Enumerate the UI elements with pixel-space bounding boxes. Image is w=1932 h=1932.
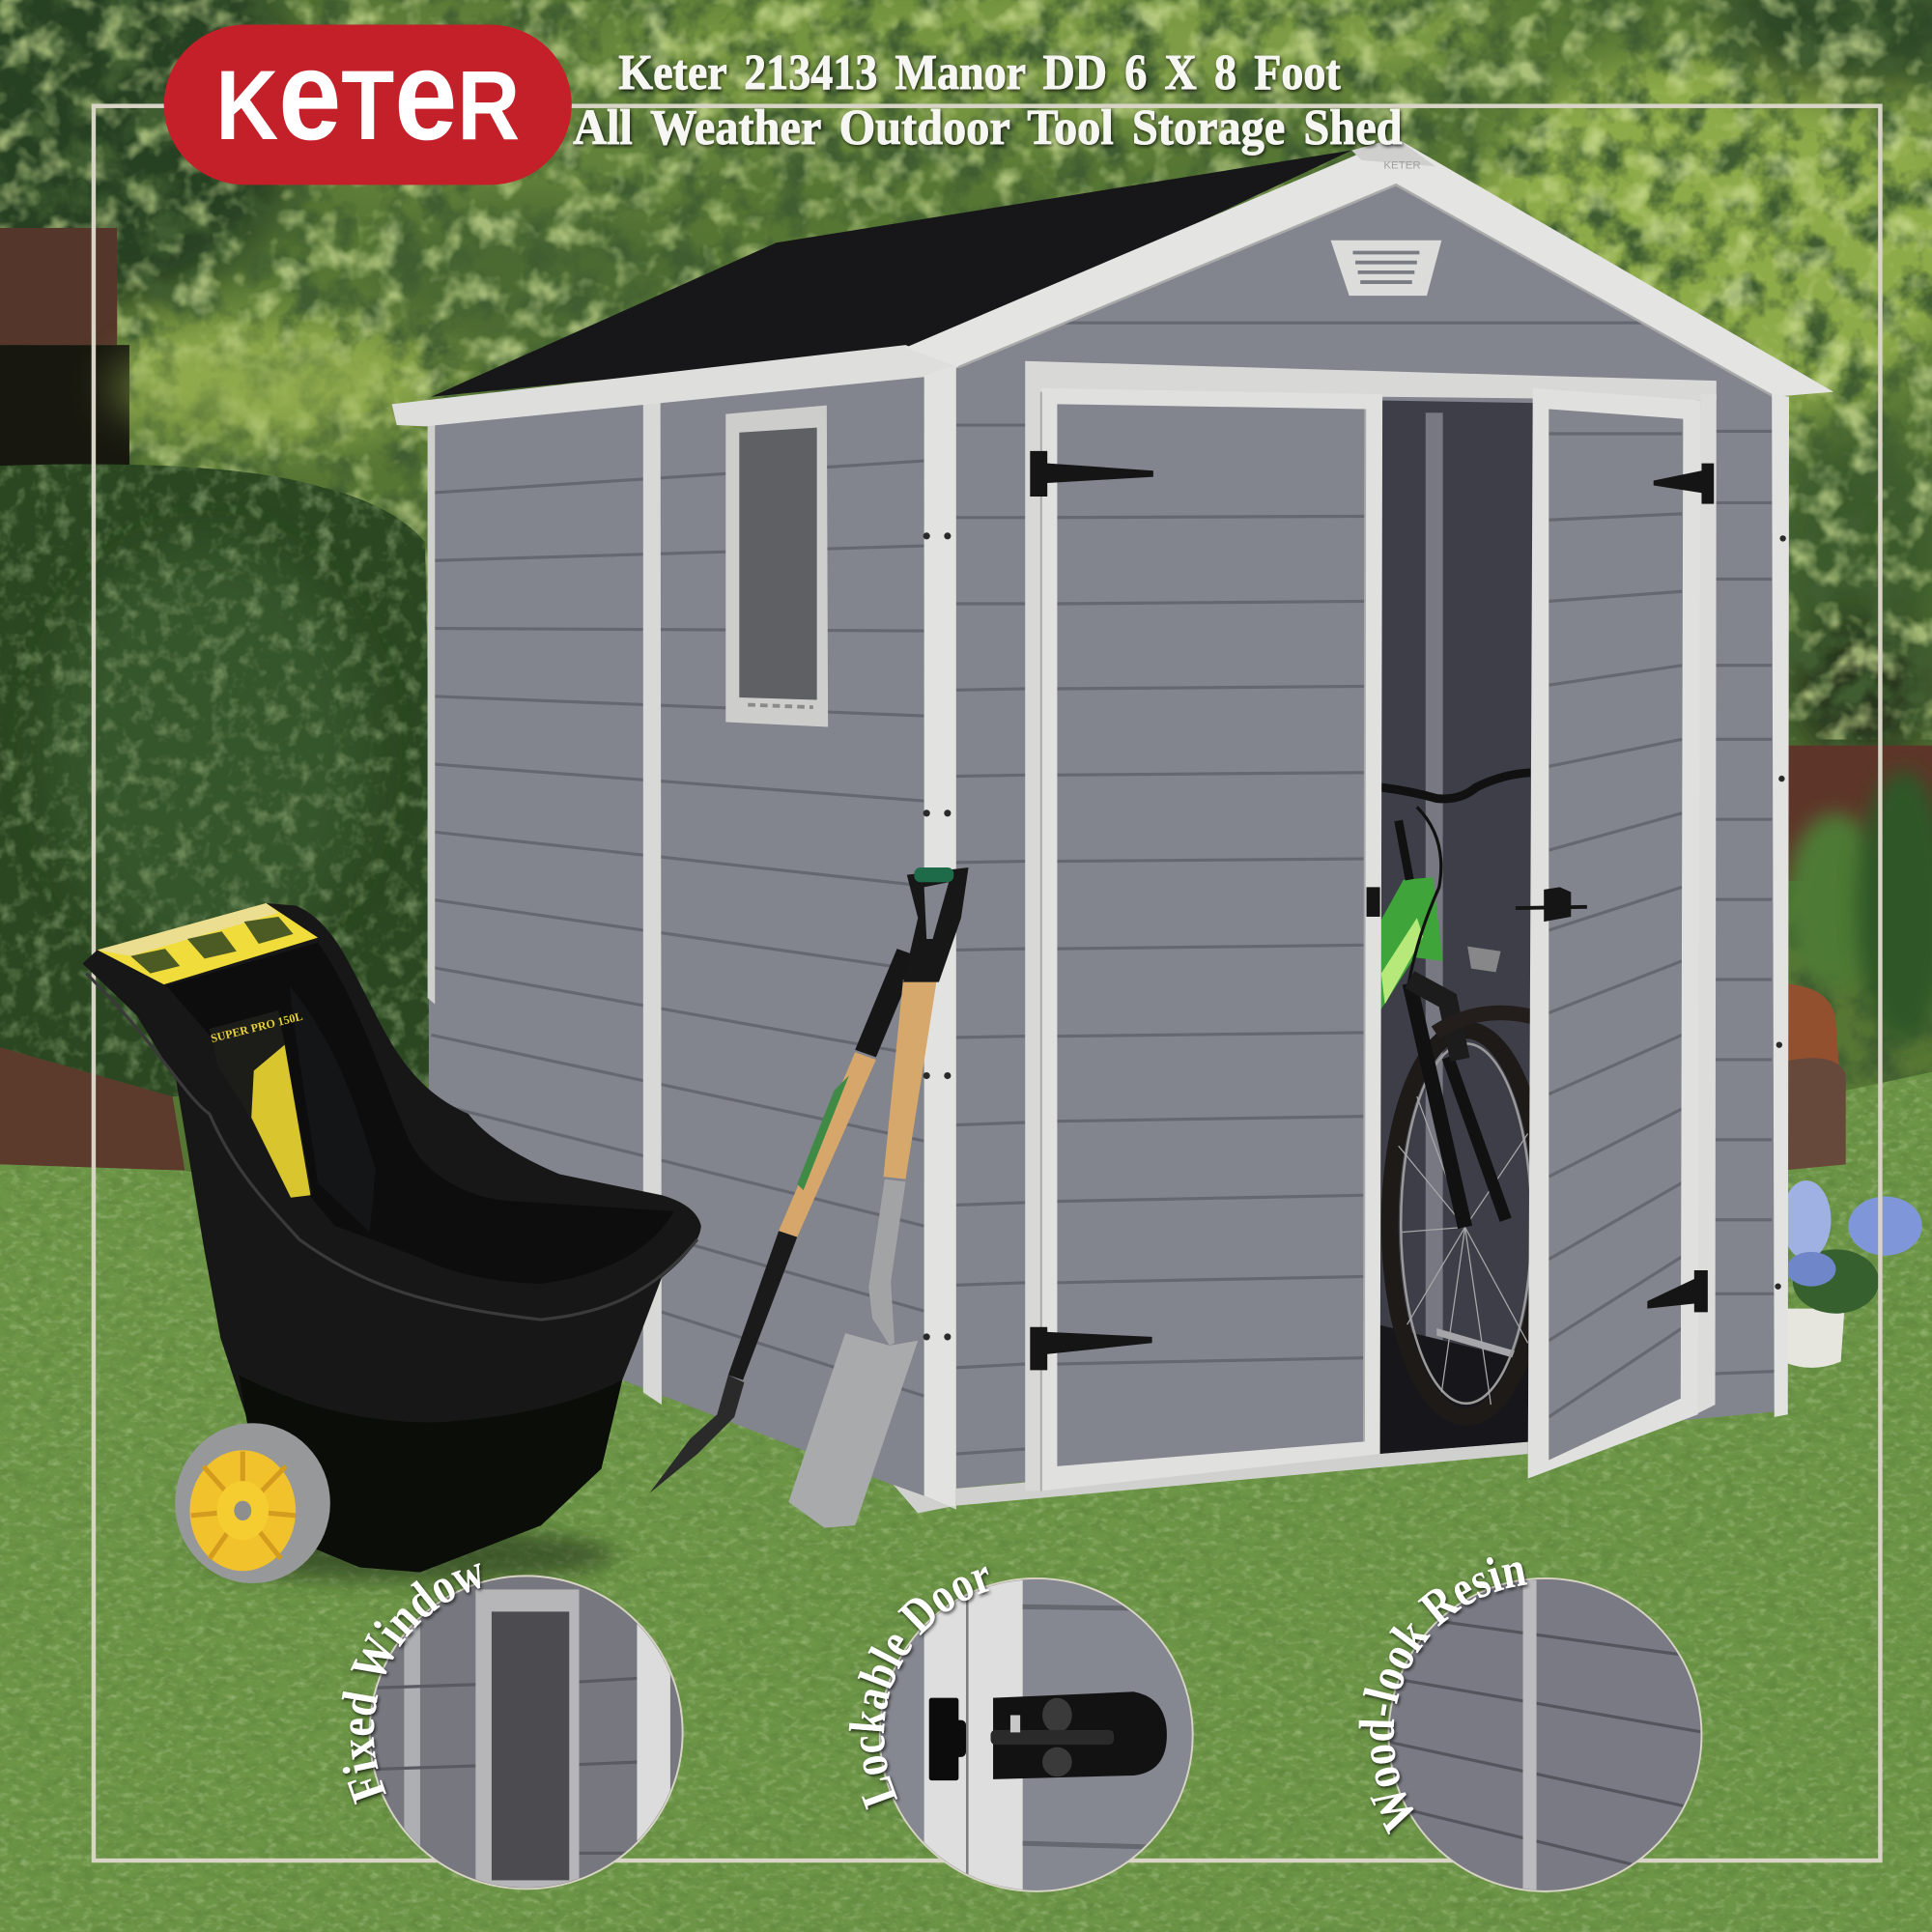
spade D grip	[903, 867, 969, 982]
fork tine	[649, 1375, 744, 1493]
background: lawn	[0, 1060, 1932, 1932]
door latch	[1367, 887, 1380, 917]
fork label	[797, 1076, 849, 1190]
roof left fascia	[392, 345, 958, 426]
left edge post	[428, 424, 435, 1005]
cart label	[210, 1009, 312, 1198]
bicycle	[1378, 773, 1543, 1417]
right edge post	[1772, 394, 1789, 1417]
detail circle: wood-look resin	[1389, 1565, 1704, 1910]
fork shaft	[779, 1052, 876, 1237]
interior post	[1426, 412, 1443, 1399]
title line 2: All Weather Outdoor Tool Storage Shed	[573, 99, 1403, 156]
detail circle: fixed window	[370, 1565, 683, 1897]
background: garden foliage	[0, 0, 1932, 1182]
gable trim shadow	[958, 185, 1775, 397]
right door	[1528, 388, 1700, 1479]
logo badge: KeTeR	[215, 24, 520, 167]
logo badge	[164, 24, 572, 185]
hinge top left	[1030, 451, 1153, 497]
gable white trim	[906, 138, 1833, 397]
left door	[1041, 388, 1382, 1491]
curved label: wood-look resin: Wood-look Resin	[1358, 1557, 1530, 1837]
spade shaft	[884, 980, 936, 1179]
corner post	[923, 365, 956, 1509]
background: brick planter left	[0, 1047, 185, 1171]
curved label: lockable door: Lockable Door	[848, 1567, 992, 1813]
hinges and hardware	[1030, 451, 1714, 1370]
spade neck	[868, 1179, 906, 1346]
curved label: fixed window: Fixed Window	[341, 1563, 483, 1808]
cart lower bin	[239, 1375, 622, 1573]
cart rim	[86, 974, 697, 1320]
latch plate	[993, 1691, 1167, 1779]
interior floor	[1378, 1324, 1530, 1454]
shed left wall siding	[431, 461, 924, 1396]
title	[573, 44, 1403, 156]
garden cart	[82, 903, 701, 1583]
cart handle insert	[98, 903, 318, 984]
spade blade	[788, 1333, 918, 1528]
window	[725, 406, 828, 727]
background: right brick planter	[1780, 983, 1846, 1171]
background: brick building left	[0, 228, 407, 469]
gable logo: KETER	[1383, 160, 1421, 172]
fork socket	[855, 949, 918, 1057]
cart bowl interior	[166, 943, 674, 1284]
interior doorway	[1378, 401, 1534, 1454]
shovels	[649, 867, 969, 1528]
shed left wall	[429, 376, 924, 1497]
background: hedge	[0, 456, 434, 1096]
roof top edge trim	[1351, 138, 1435, 166]
hinge top right	[1654, 464, 1714, 504]
shed	[392, 138, 1833, 1513]
flowers: hydrangea pot	[1781, 1180, 1922, 1368]
detail circle: lockable door	[880, 1565, 1193, 1910]
door frame	[1025, 361, 1717, 1491]
roof black panel	[431, 151, 1351, 397]
title line 1: Keter 213413 Manor DD 6 X 8 Foot	[618, 44, 1341, 100]
cart body	[82, 903, 701, 1573]
shed left wall white post	[643, 399, 662, 1405]
door handle	[1544, 887, 1571, 922]
hinge bottom right	[1647, 1270, 1708, 1312]
shed front wall	[955, 185, 1784, 1489]
gable vent	[1331, 241, 1441, 296]
hinge bottom left	[1030, 1327, 1152, 1370]
fork lower	[728, 1231, 797, 1380]
cart label: SUPER PRO 150L	[210, 1009, 304, 1045]
cart shadow	[197, 1528, 616, 1582]
base plate	[894, 1439, 1528, 1513]
cart wheel	[175, 1423, 330, 1583]
cart back wall shade	[290, 985, 376, 1233]
interior floor stripe	[1436, 1328, 1530, 1363]
front wall siding	[956, 323, 1775, 1454]
latch keeper	[929, 1698, 958, 1780]
background: right shrubs	[1786, 746, 1932, 1041]
